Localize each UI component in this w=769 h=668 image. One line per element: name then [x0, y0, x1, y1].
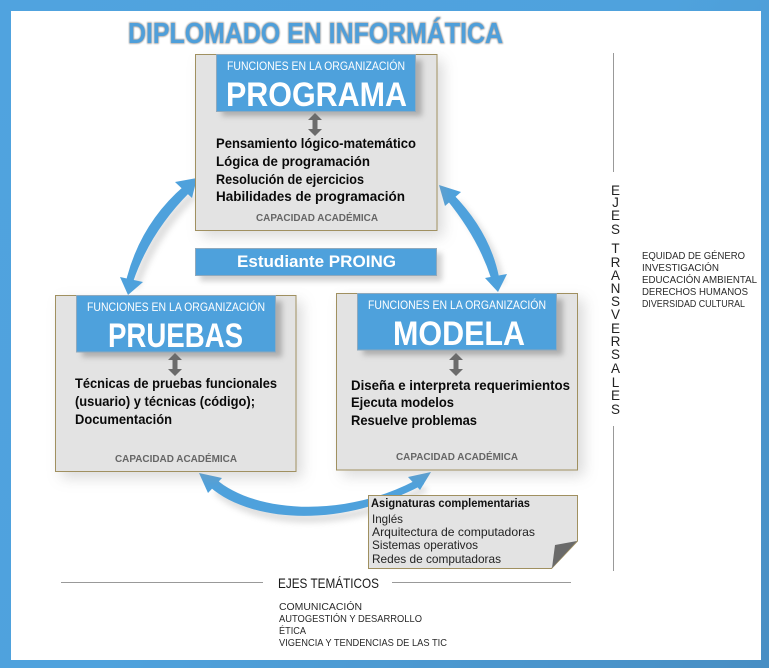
list: ejes transversales: EQUIDAD DE GÉNERO: [642, 249, 745, 262]
skills: modela: [351, 377, 570, 428]
heading: ejes temáticos: EJES TEMÁTICOS: [278, 575, 379, 591]
skills: pruebas: Documentación: [75, 411, 172, 427]
note: asignaturas complementarias: [368, 496, 578, 568]
list: ejes transversales: DERECHOS HUMANOS: [642, 286, 748, 298]
header: pruebas: FUNCIONES EN LA ORGANIZACIÓN: [87, 299, 265, 314]
vertical heading: ejes transversales: E: [611, 208, 620, 223]
banner: estudiante proing: [196, 248, 442, 281]
vertical heading: ejes transversales: R: [611, 334, 621, 349]
skills: pruebas: (usuario) y técnicas (código);: [75, 393, 255, 409]
vertical heading: ejes transversales: E: [611, 183, 620, 198]
note: asignaturas complementarias: Asignaturas complementarias: [371, 496, 530, 510]
title: DIPLOMADO EN INFORMÁTICA: [128, 16, 503, 50]
vertical heading: ejes transversales: A: [611, 361, 620, 376]
vertical heading: ejes transversales: E: [611, 321, 620, 336]
header: modela: FUNCIONES EN LA ORGANIZACIÓN: [368, 297, 546, 312]
header: programa: FUNCIONES EN LA ORGANIZACIÓN: [227, 58, 405, 73]
vertical heading: ejes transversales: [611, 53, 621, 571]
skills: programa: Lógica de programación: [216, 153, 370, 169]
header: modela: MODELA: [393, 315, 525, 353]
note: asignaturas complementarias: Arquitectura de computadoras: [372, 525, 535, 539]
title: DIPLOMADO EN INFORMÁTICA: [128, 16, 503, 50]
vertical heading: ejes transversales: A: [611, 268, 620, 283]
vertical heading: ejes transversales: R: [611, 255, 621, 270]
list: ejes temáticos: AUTOGESTIÓN Y DESARROLLO: [279, 612, 422, 625]
panel: modela: [336, 294, 584, 476]
header: pruebas: [76, 296, 282, 357]
vertical heading: ejes transversales: S: [611, 294, 620, 309]
vertical heading: ejes transversales: S: [611, 347, 620, 362]
banner: estudiante proing: Estudiante PROING: [237, 252, 396, 271]
arrow: programa to modela: [439, 185, 507, 292]
list: ejes temáticos: VIGENCIA Y TENDENCIAS DE LAS TIC: [279, 637, 447, 649]
list: ejes temáticos: [279, 600, 447, 649]
skills: modela: Diseña e interpreta requerimientos: [351, 377, 570, 393]
skills: programa: Pensamiento lógico-matemático: [216, 135, 416, 151]
note: asignaturas complementarias: Sistemas operativos: [372, 538, 478, 552]
list: ejes transversales: INVESTIGACIÓN: [642, 261, 719, 274]
vertical heading: ejes transversales: E: [611, 388, 620, 403]
icon: double arrow: [308, 113, 322, 136]
capacity label: CAPACIDAD ACADÉMICA: [256, 211, 378, 224]
vertical heading: ejes transversales: S: [611, 222, 620, 237]
note: asignaturas complementarias: Redes de computadoras: [372, 552, 501, 566]
skills: pruebas: Técnicas de pruebas funcionales: [75, 375, 277, 391]
note: asignaturas complementarias: Inglés: [372, 512, 403, 526]
list: ejes transversales: [642, 249, 757, 310]
panel: programa: [196, 54, 443, 237]
header: programa: [216, 54, 422, 116]
capacity label: CAPACIDAD ACADÉMICA: [396, 450, 518, 463]
capacity label: CAPACIDAD ACADÉMICA: [115, 452, 237, 465]
arrow: programa to pruebas: [120, 178, 197, 295]
vertical heading: ejes transversales: N: [611, 281, 620, 296]
vertical heading: ejes transversales: L: [612, 375, 620, 390]
list: ejes transversales: EDUCACIÓN AMBIENTAL: [642, 273, 757, 286]
skills: programa: Habilidades de programación: [216, 188, 405, 204]
skills: programa: Resolución de ejercicios: [216, 171, 364, 187]
panel: pruebas: [56, 296, 302, 478]
vertical heading: ejes transversales: V: [611, 307, 620, 322]
header: programa: PROGRAMA: [226, 76, 407, 114]
icon: page curl: [552, 541, 577, 568]
icon: double arrow: [168, 353, 182, 376]
skills: modela: Resuelve problemas: [351, 412, 477, 428]
skills: modela: Ejecuta modelos: [351, 394, 454, 410]
list: ejes temáticos: COMUNICACIÓN: [279, 600, 362, 613]
skills: programa: [216, 135, 416, 204]
list: ejes transversales: DIVERSIDAD CULTURAL: [642, 298, 745, 310]
header: pruebas: PRUEBAS: [108, 317, 243, 355]
list: ejes temáticos: ÉTICA: [279, 624, 306, 637]
vertical heading: ejes transversales: T: [611, 241, 620, 256]
skills: pruebas: [75, 375, 277, 427]
vertical heading: ejes transversales: S: [611, 402, 620, 417]
arrow: pruebas to modela: [199, 472, 431, 523]
icon: double arrow: [449, 353, 463, 376]
header: modela: [358, 294, 563, 355]
vertical heading: ejes transversales: J: [612, 195, 619, 210]
